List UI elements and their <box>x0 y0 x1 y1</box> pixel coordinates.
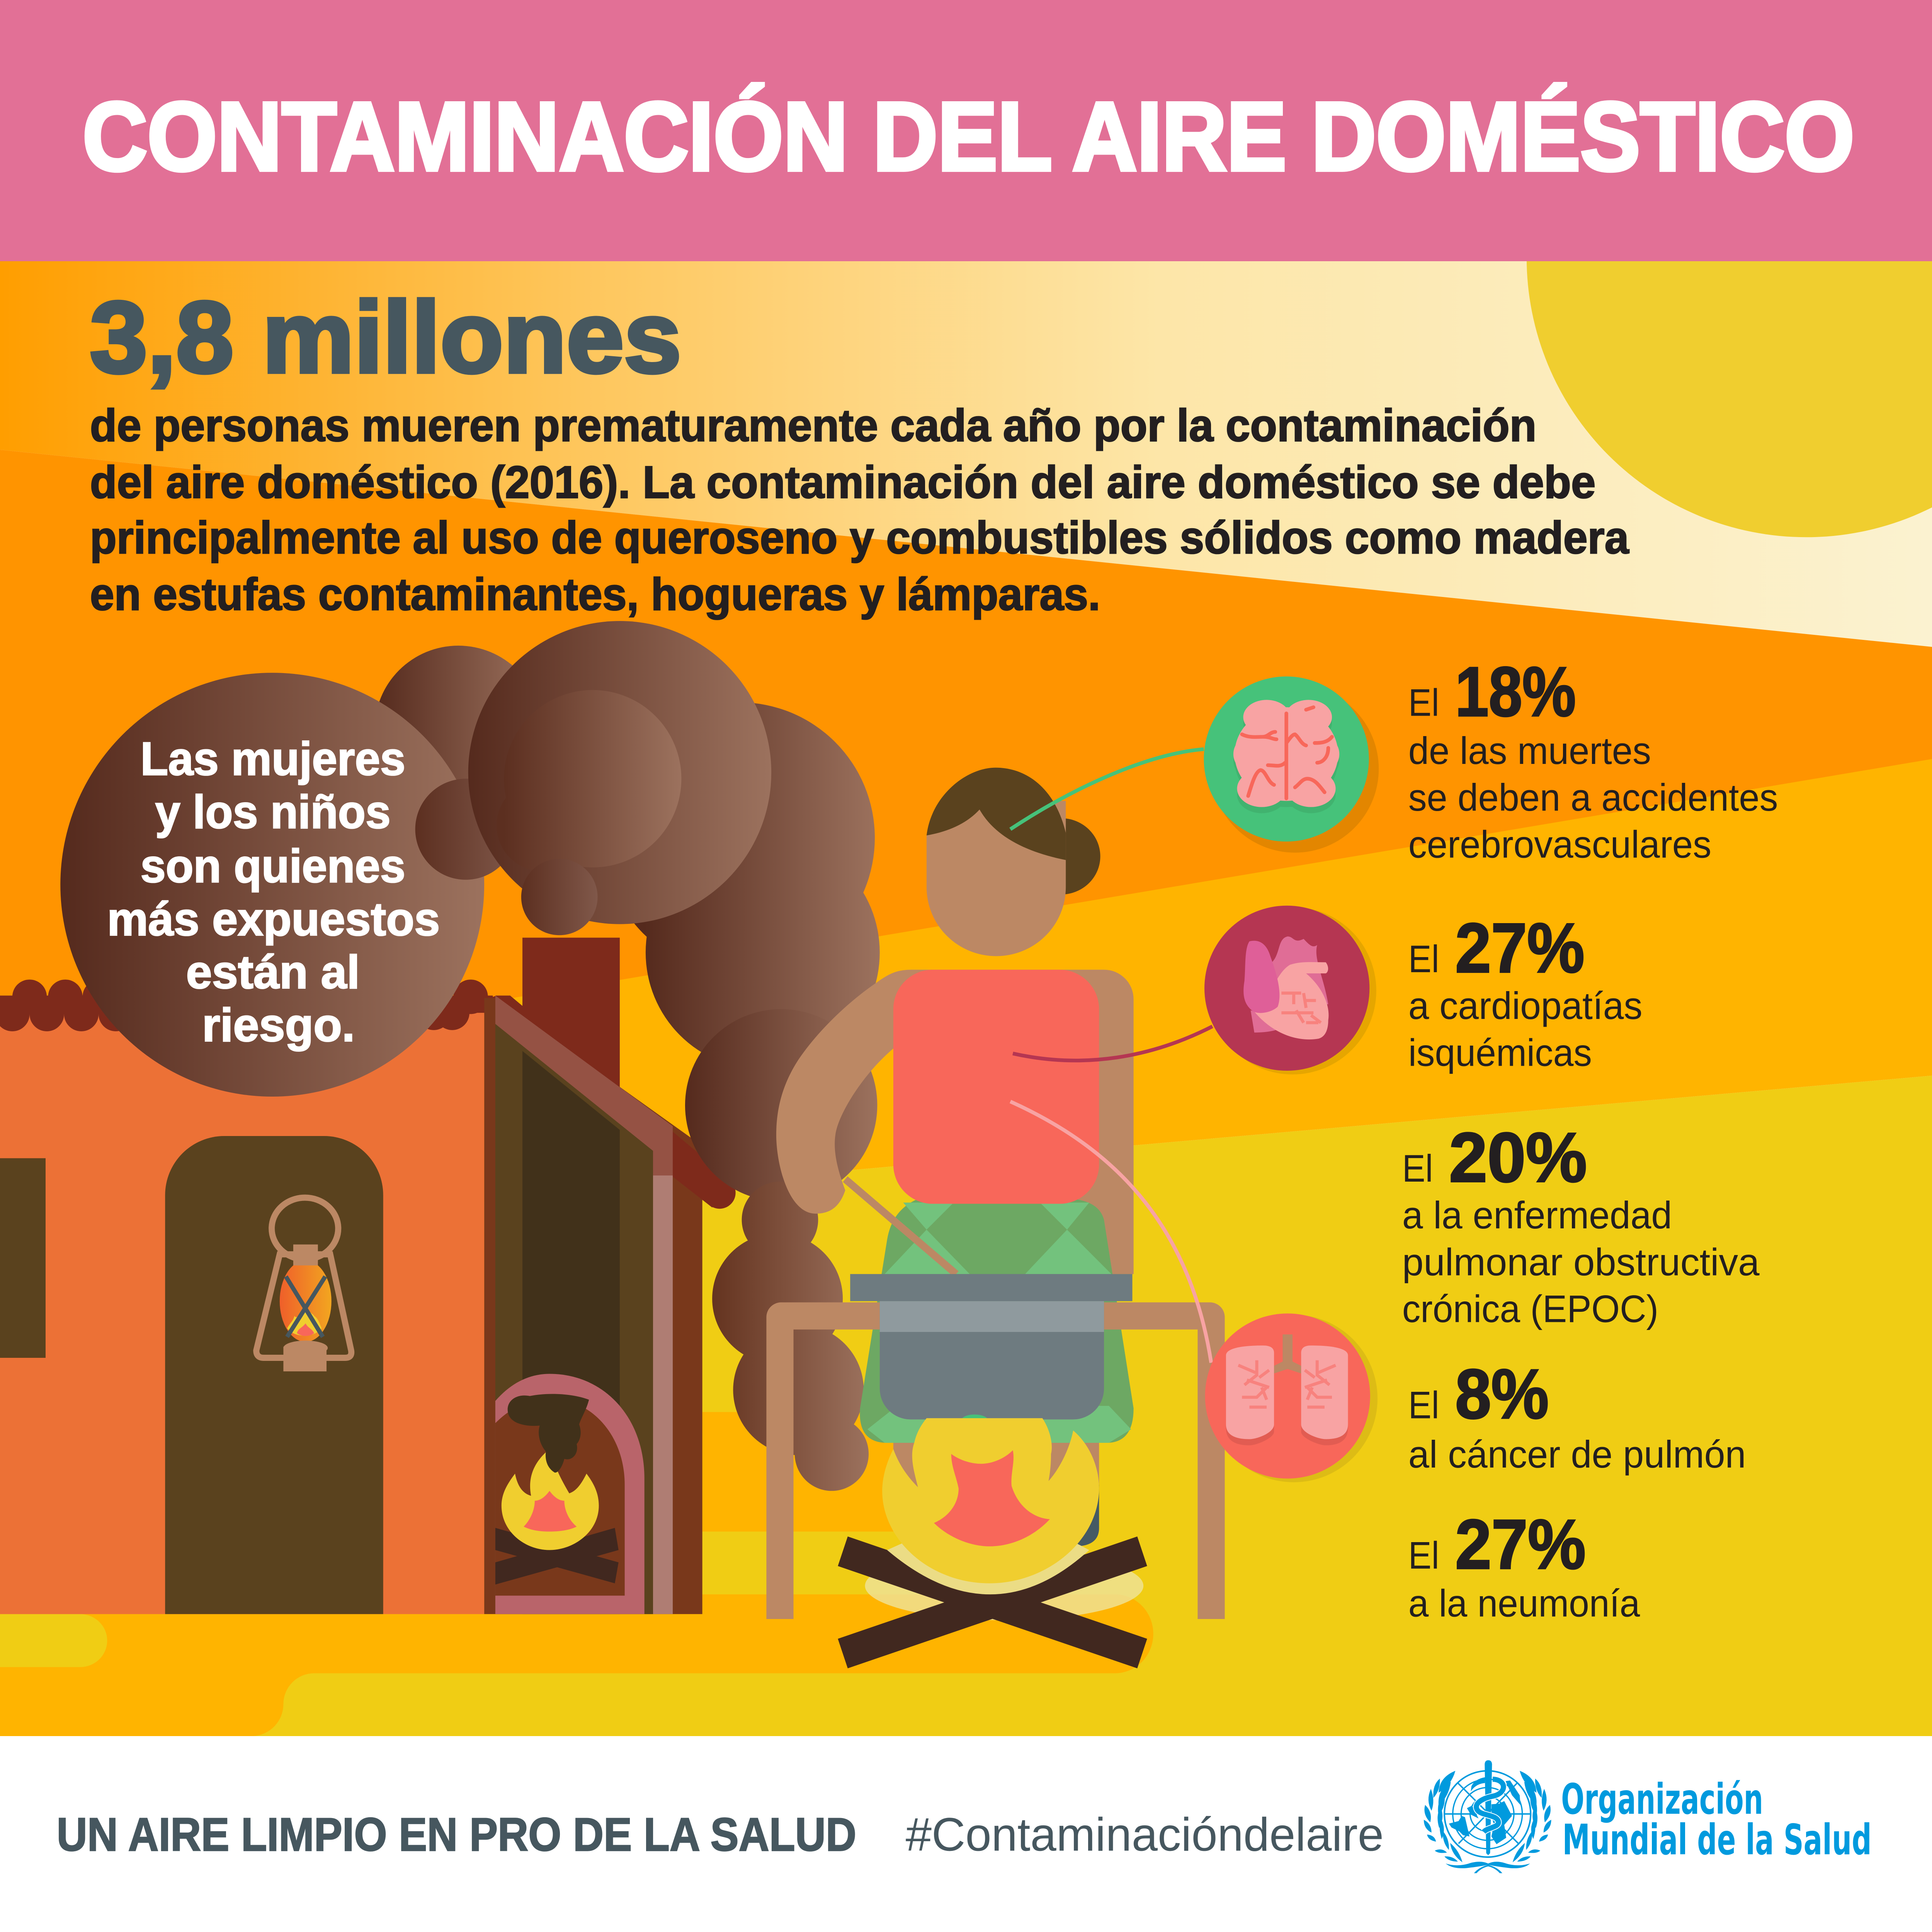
logo text: Organización <box>1561 1775 1763 1824</box>
connector: heart <box>1013 1026 1213 1061</box>
connector: brain <box>1010 749 1204 829</box>
emblem globe rings <box>1444 1771 1531 1857</box>
stat: 27% pneumonia: 27% <box>1455 1505 1586 1583</box>
oven arch <box>495 1374 645 1614</box>
icon: brain <box>1204 677 1379 853</box>
roof scallops <box>0 980 514 1031</box>
smoke cloud: front <box>415 621 771 935</box>
skirt <box>860 1199 1134 1443</box>
stat: 27% pneumonia <box>1408 1505 1640 1625</box>
far leg shadow <box>1072 1485 1099 1546</box>
callout: women and children: están al <box>186 946 360 998</box>
stat: 27%: isquémicas <box>1408 1031 1592 1074</box>
stat: 27%: 27% <box>1455 908 1585 987</box>
roof edge <box>495 996 736 1209</box>
intro text block: principalmente al uso de queroseno y combustibles sólidos como madera <box>90 512 1629 563</box>
stat: 18% <box>1408 652 1778 866</box>
emblem serpent and staff <box>1485 1760 1492 1855</box>
campfire logs <box>838 1536 1147 1668</box>
logo text <box>1561 1775 1872 1864</box>
chimney <box>522 938 620 1147</box>
hair <box>927 768 1066 860</box>
callout: women and children: y los niños <box>155 786 391 838</box>
intro text block <box>90 400 1629 620</box>
side panel dark opening <box>522 1051 620 1614</box>
back and arm <box>776 970 1134 1274</box>
head <box>927 801 1066 956</box>
footer band <box>0 1736 1932 1932</box>
pink trim <box>653 1173 673 1614</box>
intro text block: del aire doméstico (2016). La contaminación del aire doméstico se debe <box>90 457 1595 508</box>
footer slogan: UN AIRE LIMPIO EN PRO DE LA SALUD <box>57 1808 856 1861</box>
cooking pot <box>850 1274 1132 1427</box>
shirt <box>893 970 1099 1204</box>
oven fire sticks <box>495 1528 619 1585</box>
icon: lantern <box>256 1197 351 1371</box>
stat: 27% pneumonia: El <box>1408 1534 1439 1577</box>
stat: 20%: pulmonar obstructiva <box>1402 1241 1760 1283</box>
stat: 18%: 18% <box>1455 652 1576 731</box>
house wall <box>0 1013 484 1614</box>
callout: women and children <box>60 673 484 1097</box>
icon: heart <box>1204 906 1376 1075</box>
background colour bands <box>0 450 1932 1736</box>
stat: 20%: El <box>1402 1147 1433 1190</box>
oven smoke <box>508 1394 589 1473</box>
header band <box>0 0 1932 261</box>
emblem ribbon <box>1446 1862 1530 1873</box>
icon: lungs <box>1205 1313 1378 1482</box>
stat: 8%: al cáncer de pulmón <box>1408 1433 1746 1476</box>
house <box>0 938 736 1614</box>
intro text block: de personas mueren prematuramente cada año por la contaminación <box>90 400 1536 451</box>
stat: 20%: 20% <box>1449 1118 1587 1197</box>
icon: WHO emblem <box>1424 1760 1551 1873</box>
stat: 18%: El <box>1408 682 1439 724</box>
stat: 18%: se deben a accidentes <box>1408 776 1778 819</box>
callout: women and children: son quienes <box>141 840 405 892</box>
callout: women and children: más expuestos <box>107 893 440 945</box>
callout: women and children: Las mujeres <box>141 733 405 785</box>
stat: 27% pneumonia: a la neumonía <box>1408 1582 1640 1625</box>
stat: 27% <box>1408 908 1643 1074</box>
stat: 18%: de las muertes <box>1408 730 1651 772</box>
campfire flame <box>882 1418 1099 1583</box>
stat: 27%: a cardiopatías <box>1408 985 1643 1027</box>
oven fire <box>502 1449 599 1550</box>
door <box>165 1136 383 1614</box>
headline number: 3,8 millones <box>90 281 681 394</box>
stat: 8%: 8% <box>1455 1354 1549 1433</box>
legs <box>893 1417 1099 1503</box>
emblem wreath <box>1424 1771 1551 1873</box>
stat: 27%: El <box>1408 938 1439 980</box>
connector: lungs <box>1010 1102 1211 1363</box>
stat: 20%: crónica (EPOC) <box>1402 1288 1658 1330</box>
smoke cloud: back <box>374 646 880 1491</box>
footer hashtag: #Contaminacióndelaire <box>906 1808 1384 1861</box>
campfire pale rim <box>887 1528 1089 1594</box>
side wall <box>484 998 702 1614</box>
campfire glow <box>865 1551 1143 1620</box>
stirring stick <box>845 1179 956 1274</box>
stat: 8% <box>1408 1354 1746 1476</box>
emblem continents <box>1449 1781 1520 1844</box>
stat: 18%: cerebrovasculares <box>1408 823 1711 866</box>
stat: 20% <box>1402 1118 1760 1330</box>
woman cooking <box>776 768 1134 1546</box>
intro text block: en estufas contaminantes, hogueras y lámparas. <box>90 569 1100 620</box>
table <box>766 1303 1225 1619</box>
stat: 8%: El <box>1408 1384 1439 1426</box>
stat: 20%: a la enfermedad <box>1402 1194 1672 1236</box>
callout: women and children: riesgo. <box>202 999 355 1051</box>
sun <box>1527 0 1932 537</box>
window <box>0 1158 46 1358</box>
hair bun <box>1021 818 1100 895</box>
side panel <box>495 1010 653 1614</box>
